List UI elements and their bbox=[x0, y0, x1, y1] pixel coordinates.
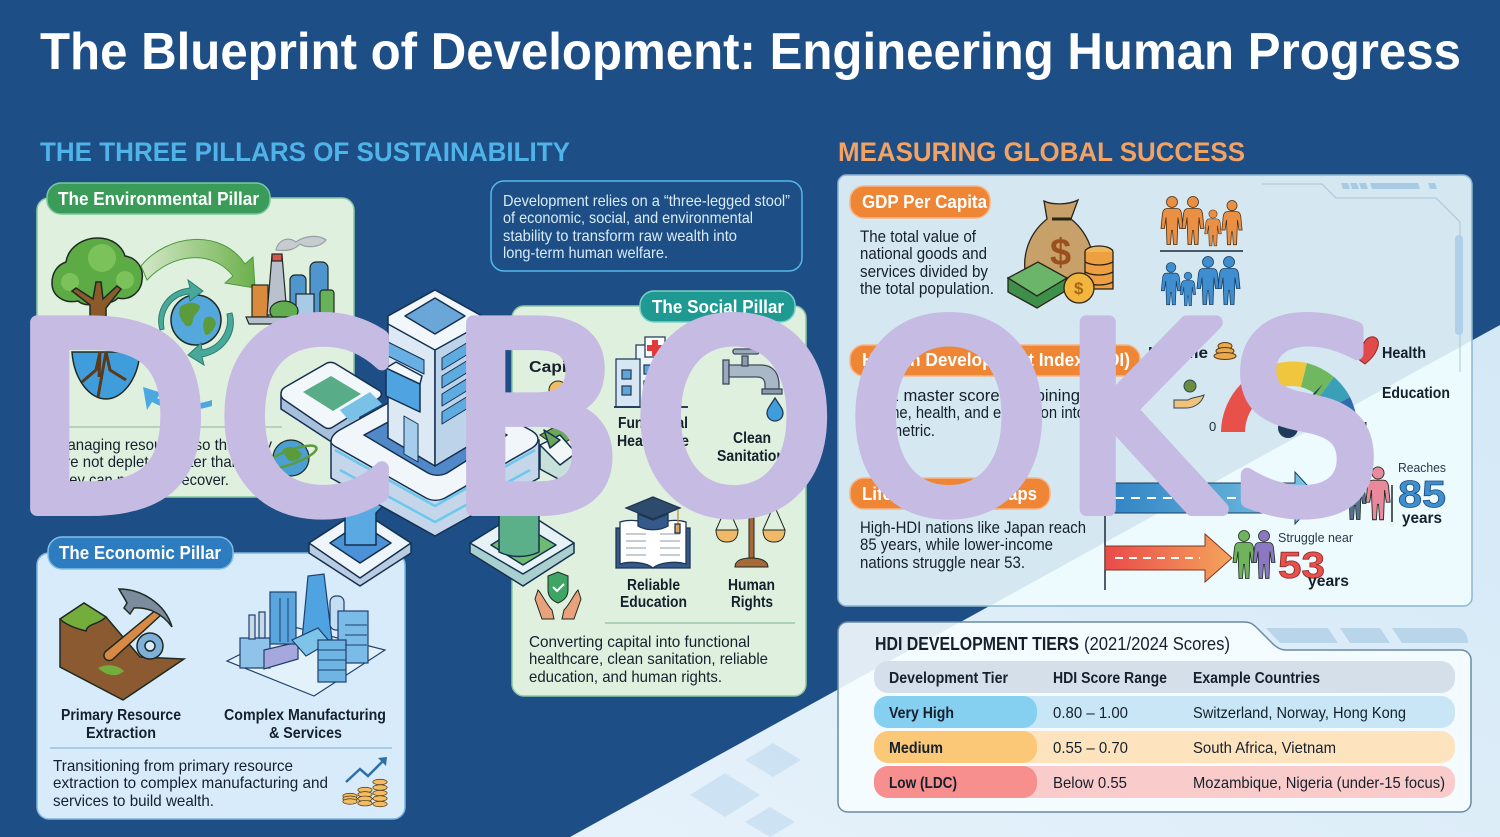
label: clean sanitation bbox=[717, 430, 785, 465]
icon: money bag, cash and coins: $ bbox=[1050, 232, 1071, 274]
table header: Example Countries bbox=[1193, 670, 1320, 687]
icon: globe with cycle arrows bbox=[159, 280, 233, 365]
label: complex manufacturing: Complex Manufacturing bbox=[224, 707, 386, 724]
text: environmental description bbox=[55, 437, 272, 489]
label: human rights bbox=[728, 577, 775, 611]
pedestal: left water bbox=[309, 483, 411, 586]
text: environmental description: Managing resources so that they bbox=[55, 437, 272, 454]
panel: measuring global success bbox=[838, 175, 1472, 606]
text: environmental description: they can naturally recover. bbox=[57, 472, 229, 489]
arrow: low-income life expectancy bbox=[1105, 534, 1232, 582]
table header: Development Tier bbox=[889, 670, 1008, 687]
table row: low: Low (LDC) bbox=[889, 775, 957, 792]
text: struggle near 53: 53 bbox=[1278, 545, 1325, 586]
icon: money bag, cash and coins: $ bbox=[1074, 279, 1084, 298]
tag: life expectancy: Life Expectancy Gaps bbox=[862, 484, 1037, 504]
heading: tiers: (2021/2024 Scores) bbox=[1084, 634, 1230, 654]
text: life expectancy description: 85 years, while lower-income bbox=[860, 536, 1053, 554]
icon: scales bbox=[716, 505, 785, 567]
icon: mining hill with pickaxe bbox=[60, 589, 184, 700]
chart: HDI gauge: 1 bbox=[1362, 419, 1369, 434]
label: reliable education: Reliable bbox=[627, 577, 680, 594]
tag: social: The Social Pillar bbox=[652, 297, 784, 317]
table row: medium bbox=[874, 731, 1455, 763]
table row: medium: Medium bbox=[889, 740, 943, 757]
icon: hand with plant bbox=[1174, 380, 1204, 408]
panel: social pillar bbox=[512, 291, 806, 696]
callout: three-legged stool bbox=[491, 181, 802, 271]
text: HDI description bbox=[860, 387, 1085, 440]
callout: three-legged stool: stability to transform raw wealth into bbox=[503, 228, 737, 245]
text: reaches 85 bbox=[1398, 460, 1446, 527]
text: HDI description: one metric. bbox=[860, 422, 935, 440]
label: primary resource extraction: Primary Resource bbox=[61, 707, 181, 724]
label: clean sanitation: Clean bbox=[733, 430, 771, 447]
table row: very high: 0.80 – 1.00 bbox=[1053, 705, 1128, 722]
pedestal: right green bbox=[470, 510, 574, 586]
text: struggle near 53: years bbox=[1308, 573, 1349, 590]
icon: low-income couple bbox=[1233, 530, 1275, 578]
icon: book and cap bbox=[616, 497, 690, 568]
text: GDP description: services divided by bbox=[860, 263, 989, 281]
text: reaches 85: years bbox=[1402, 510, 1442, 527]
platform: right small bbox=[540, 430, 576, 481]
text: GDP description: national goods and bbox=[860, 245, 987, 263]
callout: three-legged stool: of economic, social, and environmental bbox=[503, 210, 753, 227]
chart: HDI gauge bbox=[1209, 362, 1369, 438]
tag: HDI bbox=[850, 345, 1140, 376]
tag: social bbox=[640, 291, 795, 322]
table header: HDI Score Range bbox=[1053, 670, 1167, 687]
decoration: tier chips bbox=[1266, 628, 1468, 643]
label: income with coins: Income bbox=[1148, 345, 1208, 362]
label: income with coins bbox=[1148, 342, 1236, 362]
heading: tiers bbox=[875, 634, 1230, 654]
tag: economic: The Economic Pillar bbox=[59, 543, 221, 563]
callout: three-legged stool: Development relies on a “three-legged stool” bbox=[503, 193, 790, 210]
label: functional healthcare: Healthcare bbox=[617, 433, 689, 450]
icon: elderly couple bbox=[1344, 467, 1392, 522]
icon: faucet bbox=[723, 349, 783, 421]
tag: life expectancy bbox=[850, 478, 1050, 509]
table row: medium: 0.55 – 0.70 bbox=[1053, 740, 1128, 757]
tag: environmental bbox=[47, 183, 270, 214]
label: complex manufacturing: & Services bbox=[269, 725, 342, 742]
text: reaches 85: 85 bbox=[1398, 474, 1446, 516]
label: functional healthcare: Functional bbox=[618, 415, 688, 432]
label: health with heart bbox=[1351, 337, 1426, 364]
icon: capital coin and cash bbox=[540, 381, 579, 447]
text: social description: Converting capital into functional bbox=[529, 634, 750, 651]
text: life expectancy description: nations struggle near 53. bbox=[860, 554, 1025, 572]
table row: very high bbox=[874, 696, 1455, 728]
table row: low: Below 0.55 bbox=[1053, 775, 1127, 792]
text: struggle near 53: Struggle near bbox=[1278, 530, 1354, 545]
icon: ringed planet bbox=[263, 440, 319, 476]
arrow: high-HDI life expectancy bbox=[1105, 472, 1319, 524]
icon: tree with roots bbox=[52, 238, 142, 399]
table header bbox=[874, 661, 1455, 693]
heading: tiers: HDI DEVELOPMENT TIERS bbox=[875, 634, 1079, 654]
platform: left green bbox=[281, 362, 382, 441]
label: health with heart: Health bbox=[1382, 345, 1426, 362]
icon: money bag, cash and coins bbox=[1008, 200, 1113, 308]
table row: low: Mozambique, Nigeria (under-15 focus) bbox=[1193, 775, 1445, 792]
label: primary resource extraction: Extraction bbox=[86, 725, 156, 742]
icon: hospital bbox=[614, 337, 688, 407]
table row: low bbox=[874, 766, 1455, 798]
label: human rights: Rights bbox=[731, 594, 773, 611]
tag: environmental: The Environmental Pillar bbox=[58, 189, 259, 209]
text: GDP description: the total population. bbox=[860, 280, 994, 298]
text: life expectancy description: High-HDI nations like Japan reach bbox=[860, 519, 1086, 537]
panel: environmental pillar bbox=[37, 183, 354, 497]
arrow: blue return bbox=[143, 387, 212, 410]
arrow: green arc bbox=[141, 239, 255, 288]
label: education: Education bbox=[1382, 385, 1450, 402]
text: HDI description: income, health, and education into bbox=[860, 404, 1085, 422]
tag: economic bbox=[48, 537, 233, 569]
label: human rights: Human bbox=[728, 577, 775, 594]
icon: factory city bbox=[246, 236, 338, 324]
icon: population fraction bbox=[1160, 196, 1243, 306]
label: complex manufacturing bbox=[224, 707, 386, 742]
chart: HDI gauge: 0 bbox=[1209, 419, 1216, 434]
label: primary resource extraction bbox=[61, 707, 181, 742]
text: economic description: services to build wealth. bbox=[53, 793, 214, 810]
table row: medium: South Africa, Vietnam bbox=[1193, 740, 1336, 757]
text: GDP description: The total value of bbox=[860, 228, 976, 246]
icon: hands with shield bbox=[535, 572, 581, 619]
illustration: central isometric building bbox=[281, 290, 576, 586]
text: GDP description bbox=[860, 228, 994, 298]
platform: main base bbox=[331, 377, 539, 536]
label: capital: Capital bbox=[529, 359, 587, 376]
tag: GDP: GDP Per Capita bbox=[862, 192, 988, 212]
watermark: DC BOOKS: K bbox=[1063, 273, 1223, 570]
heading: three pillars: THE THREE PILLARS OF SUSTAINABILITY bbox=[40, 137, 570, 167]
text: life expectancy description bbox=[860, 519, 1086, 572]
text: social description bbox=[529, 634, 768, 686]
text: social description: healthcare, clean sanitation, reliable bbox=[529, 651, 768, 668]
icon: growth coins bbox=[343, 757, 387, 807]
panel: economic pillar bbox=[37, 537, 405, 819]
text: environmental description: are not depleted faster than bbox=[57, 454, 240, 471]
watermark: DC BOOKS: DCBOO bbox=[12, 272, 1050, 570]
decoration: panel corner chips bbox=[1341, 183, 1437, 189]
callout: three-legged stool: long-term human welfare. bbox=[503, 245, 668, 262]
table row: very high: Very High bbox=[889, 705, 954, 722]
text: social description: education, and human rights. bbox=[529, 669, 722, 686]
text: reaches 85: Reaches bbox=[1398, 460, 1446, 475]
title: The Blueprint of Development: Engineering Human Progress bbox=[40, 23, 1461, 81]
tag: HDI: Human Development Index (HDI) bbox=[862, 350, 1130, 370]
tag: GDP bbox=[850, 186, 990, 218]
watermark: DC BOOKS: S bbox=[1231, 273, 1381, 570]
heading: measuring success: MEASURING GLOBAL SUCCESS bbox=[838, 137, 1245, 167]
text: economic description bbox=[53, 758, 328, 810]
label: functional healthcare bbox=[617, 415, 689, 450]
text: struggle near 53 bbox=[1278, 530, 1354, 590]
label: reliable education bbox=[620, 577, 687, 611]
text: economic description: Transitioning from primary resource bbox=[53, 758, 293, 775]
table row: very high: Switzerland, Norway, Hong Kong bbox=[1193, 705, 1406, 722]
label: reliable education: Education bbox=[620, 594, 687, 611]
icon: manufacturing city bbox=[227, 574, 385, 696]
panel: HDI development tiers bbox=[838, 622, 1471, 812]
label: clean sanitation: Sanitation bbox=[717, 448, 785, 465]
text: economic description: extraction to complex manufacturing and bbox=[53, 775, 328, 792]
tower bbox=[386, 290, 482, 466]
text: HDI description: A 0-1 master score combining bbox=[860, 387, 1080, 405]
